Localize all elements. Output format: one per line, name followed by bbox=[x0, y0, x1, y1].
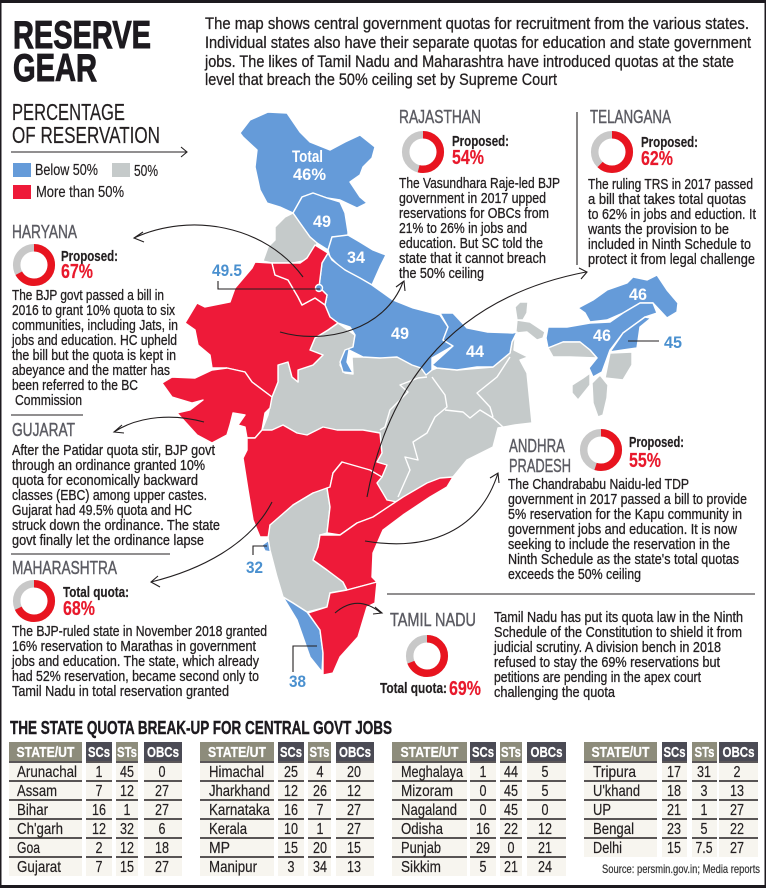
Gujarat bbox=[162, 368, 272, 443]
body text bbox=[12, 442, 220, 549]
map value labels: 49 bbox=[391, 324, 409, 343]
table 3: 0 bbox=[480, 802, 487, 819]
table 3: 1 bbox=[480, 764, 487, 781]
table 2: 7 bbox=[316, 802, 324, 819]
body text: Commission bbox=[15, 392, 82, 409]
table 1: 1 bbox=[96, 764, 103, 781]
table 3: OBCs bbox=[530, 744, 562, 761]
table 4: 31 bbox=[697, 764, 711, 781]
table 4: 15 bbox=[667, 840, 681, 857]
table 1: 6 bbox=[158, 821, 166, 838]
body text: judicial scrutiny. A division bench in 2018 bbox=[493, 639, 721, 656]
Bihar bbox=[432, 313, 517, 370]
table 2: 27 bbox=[347, 821, 361, 838]
legend bbox=[13, 162, 158, 201]
map of India bbox=[162, 112, 678, 675]
table 2: Jharkhand bbox=[209, 783, 270, 800]
table 3: Sikkim bbox=[401, 859, 441, 876]
Assam bbox=[546, 303, 657, 377]
map value labels: 46 bbox=[593, 326, 611, 345]
body text bbox=[11, 623, 267, 700]
body text: 21% to 26% in jobs and bbox=[399, 220, 527, 237]
table 4: 22 bbox=[730, 821, 744, 838]
body text: jobs and education. HC upheld bbox=[11, 332, 177, 349]
map leader lines bbox=[218, 281, 659, 672]
table 1: Arunachal bbox=[17, 764, 77, 781]
arrow: Haryana bbox=[134, 225, 303, 277]
body text: exceeds the 50% ceiling bbox=[508, 566, 641, 583]
table 3: 21 bbox=[538, 840, 552, 857]
table 1: 16 bbox=[92, 802, 106, 819]
donut chart bbox=[595, 135, 629, 169]
table 1: STs bbox=[117, 744, 137, 761]
body text: jobs and education. The state, which already bbox=[11, 653, 259, 670]
table 1: 27 bbox=[155, 802, 169, 819]
panel: Gujarat bbox=[12, 420, 220, 549]
table 3: Punjab bbox=[401, 840, 441, 857]
body text bbox=[508, 476, 747, 583]
body text: reservations for OBCs from bbox=[399, 205, 549, 222]
map value labels: 44 bbox=[466, 342, 485, 361]
body text: The BJP govt passed a bill in bbox=[12, 287, 164, 304]
table 1: Assam bbox=[17, 783, 57, 800]
Nagaland bbox=[610, 317, 651, 352]
table 1 bbox=[9, 742, 182, 876]
arrow: Rajasthan bbox=[280, 281, 405, 336]
table 2: Kerala bbox=[209, 821, 247, 838]
body text: communities, including Jats, in bbox=[12, 317, 178, 334]
table 1: OBCs bbox=[147, 744, 179, 761]
table 2: 3 bbox=[288, 859, 295, 876]
title bbox=[13, 14, 151, 90]
body text: abeyance and the matter has bbox=[12, 362, 170, 379]
table 1: SCs bbox=[88, 744, 110, 761]
table 4: 5 bbox=[700, 821, 708, 838]
table 3: 29 bbox=[476, 840, 490, 857]
heading: PRADESH bbox=[509, 456, 571, 476]
table 1: Gujarat bbox=[17, 859, 61, 876]
panel: Rajasthan: 54% bbox=[452, 147, 484, 169]
panel: Haryana: 67% bbox=[61, 261, 93, 283]
table 1: Bihar bbox=[17, 802, 49, 819]
map value labels: 34 bbox=[347, 248, 366, 267]
Andhra Pradesh bbox=[313, 477, 453, 590]
panel: Tamil Nadu: Total quota: bbox=[380, 680, 447, 697]
table 3: 0 bbox=[542, 802, 549, 819]
table 4: U'khand bbox=[593, 783, 640, 800]
panel: Haryana bbox=[11, 222, 178, 409]
body text: struck down the ordinance. The state bbox=[12, 517, 220, 534]
table 1: 7 bbox=[96, 859, 103, 876]
legend: More than 50% bbox=[36, 184, 124, 201]
table 2: 4 bbox=[316, 764, 324, 781]
table 2: 34 bbox=[313, 859, 327, 876]
map value labels: 49 bbox=[313, 212, 331, 231]
panel: Maharashtra: 68% bbox=[63, 598, 95, 620]
table 4: 13 bbox=[730, 783, 744, 800]
table 1: 12 bbox=[92, 821, 106, 838]
intro text: level that breach the 50% ceiling set by Supreme Court bbox=[205, 70, 557, 89]
Rajasthan bbox=[185, 262, 338, 397]
body text: 2016 to grant 10% quota to six bbox=[12, 302, 175, 319]
table 4: 21 bbox=[667, 802, 681, 819]
table 2: Himachal bbox=[209, 764, 264, 781]
table 2: 15 bbox=[347, 840, 361, 857]
panel: Telangana: Proposed: bbox=[641, 134, 698, 151]
body text: After the Patidar quota stir, BJP govt bbox=[12, 442, 216, 459]
table 2: STs bbox=[310, 744, 330, 761]
body text: govt finally let the ordinance lapse bbox=[12, 532, 204, 549]
table 2 bbox=[200, 742, 374, 876]
table 1: Ch'garh bbox=[17, 821, 63, 838]
table 1: 7 bbox=[96, 783, 103, 800]
table 3: 16 bbox=[476, 821, 490, 838]
table 4: STs bbox=[694, 744, 714, 761]
table 3: 45 bbox=[504, 802, 518, 819]
Mizoram bbox=[592, 375, 608, 417]
body text: government jobs and education. It is now bbox=[508, 521, 737, 538]
table 3: Odisha bbox=[401, 821, 443, 838]
heading: TAMIL NADU bbox=[390, 610, 476, 630]
heading: ANDHRA bbox=[509, 436, 565, 456]
table 3: 22 bbox=[504, 821, 518, 838]
table 2: 12 bbox=[284, 783, 298, 800]
body text bbox=[399, 175, 560, 282]
body text: Tamil Nadu in total reservation granted bbox=[12, 683, 229, 700]
table 3: 5 bbox=[542, 764, 549, 781]
arrow: Gujarat bbox=[114, 417, 204, 433]
legend heading bbox=[12, 99, 160, 148]
heading: RAJASTHAN bbox=[399, 107, 481, 127]
body text: classes (EBC) among upper castes. bbox=[12, 487, 207, 504]
Punjab bbox=[263, 213, 317, 263]
table 1: 32 bbox=[120, 821, 134, 838]
Haryana bbox=[272, 245, 328, 305]
Kerala bbox=[283, 597, 323, 672]
table 3 bbox=[392, 742, 566, 876]
table 4: 18 bbox=[667, 783, 681, 800]
table 2: MP bbox=[209, 840, 230, 857]
Jammu and Kashmir bbox=[240, 112, 375, 213]
body text: The BJP-ruled state in November 2018 granted bbox=[12, 623, 267, 640]
legend: Below 50% bbox=[35, 162, 98, 179]
body text: 16% reservation to Marathas in government bbox=[12, 638, 257, 655]
table 3: SCs bbox=[472, 744, 494, 761]
table 2: 20 bbox=[313, 840, 327, 857]
body text: state that it cannot breach bbox=[399, 250, 546, 267]
table 1: 0 bbox=[158, 764, 166, 781]
donut chart bbox=[17, 248, 51, 282]
legend arrow bbox=[11, 147, 187, 157]
body text: seeking to include the reservation in the bbox=[508, 536, 730, 553]
Sikkim bbox=[515, 302, 528, 320]
table 1: 12 bbox=[120, 783, 134, 800]
panel: Telangana bbox=[587, 107, 757, 268]
table 3: Nagaland bbox=[401, 802, 457, 819]
table 3: Mizoram bbox=[401, 783, 453, 800]
internal borders bbox=[380, 357, 510, 497]
table 2: 12 bbox=[347, 783, 361, 800]
title: RESERVE bbox=[13, 14, 151, 57]
panel: Haryana: Proposed: bbox=[61, 248, 118, 265]
table 3: STs bbox=[501, 744, 521, 761]
table 4: STATE/UT bbox=[592, 744, 650, 761]
table 2: 26 bbox=[313, 783, 327, 800]
Himachal Pradesh bbox=[293, 193, 348, 250]
table 2: Karnataka bbox=[209, 802, 270, 819]
map value labels: 38 bbox=[289, 672, 306, 691]
body text: education. But SC told the bbox=[399, 235, 543, 252]
table 3: Meghalaya bbox=[401, 764, 463, 781]
table 3: 12 bbox=[538, 821, 552, 838]
body text bbox=[11, 287, 178, 409]
table 1: 12 bbox=[120, 840, 134, 857]
table 2: Manipur bbox=[209, 859, 258, 876]
table 3: 5 bbox=[480, 859, 487, 876]
body text: been referred to the BC bbox=[12, 377, 138, 394]
Meghalaya bbox=[548, 342, 597, 358]
table 1: 1 bbox=[124, 802, 131, 819]
title: GEAR bbox=[13, 47, 97, 90]
heading: GUJARAT bbox=[12, 420, 75, 440]
table 4 bbox=[584, 742, 758, 857]
Delhi bbox=[316, 284, 322, 292]
table 2: 15 bbox=[284, 840, 298, 857]
panel: Andhra Pradesh: 55% bbox=[629, 450, 661, 472]
body text: through an ordinance granted 10% bbox=[12, 457, 205, 474]
table 4: Tripura bbox=[593, 764, 636, 781]
Tamil Nadu bbox=[308, 582, 377, 675]
table 3: 44 bbox=[504, 764, 518, 781]
table 3: STATE/UT bbox=[400, 744, 458, 761]
map value labels: 46 bbox=[629, 285, 647, 304]
table 3: 45 bbox=[504, 783, 518, 800]
table 1: 18 bbox=[155, 840, 169, 857]
body text: Gujarat had 49.5% quota and HC bbox=[12, 502, 192, 519]
table 2: 27 bbox=[347, 802, 361, 819]
table 4: UP bbox=[593, 802, 611, 819]
table 2: 16 bbox=[284, 802, 298, 819]
table 4: 27 bbox=[730, 840, 744, 857]
table 1: Goa bbox=[17, 840, 40, 857]
table 4: Delhi bbox=[593, 840, 622, 857]
arrow: Telangana bbox=[367, 268, 587, 497]
map value labels bbox=[212, 147, 682, 691]
table 2: 13 bbox=[347, 859, 361, 876]
table 3: 0 bbox=[508, 840, 515, 857]
table 2: SCs bbox=[280, 744, 302, 761]
table 2: 25 bbox=[284, 764, 298, 781]
intro text bbox=[204, 14, 751, 89]
panel: Telangana: 62% bbox=[641, 148, 673, 170]
panel: Andhra Pradesh: Proposed: bbox=[629, 434, 684, 451]
table 4: 2 bbox=[734, 764, 741, 781]
body text: The Chandrababu Naidu-led TDP bbox=[508, 476, 689, 493]
donut chart bbox=[410, 639, 444, 673]
table 4: OBCs bbox=[722, 744, 754, 761]
table 4: 1 bbox=[700, 802, 708, 819]
body text: quota for economically backward bbox=[12, 472, 198, 489]
table 3: 21 bbox=[504, 859, 518, 876]
body text: had 52% reservation, became second only to bbox=[12, 668, 259, 685]
table 3: 0 bbox=[480, 783, 487, 800]
table 3: 24 bbox=[538, 859, 552, 876]
body text bbox=[587, 176, 757, 268]
table 2: STATE/UT bbox=[208, 744, 266, 761]
table 2: 20 bbox=[347, 764, 361, 781]
body text: a bill that takes total quotas bbox=[588, 191, 746, 208]
panel: Andhra Pradesh bbox=[508, 433, 747, 583]
panel: Tamil Nadu: 69% bbox=[449, 678, 481, 700]
Karnataka bbox=[268, 488, 347, 612]
table 2: 10 bbox=[284, 821, 298, 838]
body text: government in 2017 upped bbox=[399, 190, 546, 207]
legend heading: PERCENTAGE bbox=[12, 99, 125, 125]
body text: the 50% ceiling bbox=[399, 265, 484, 282]
Maharashtra bbox=[243, 425, 387, 537]
donut chart bbox=[17, 584, 51, 618]
panel: Tamil Nadu bbox=[380, 609, 743, 701]
table 1: 45 bbox=[120, 764, 134, 781]
heading: HARYANA bbox=[12, 222, 77, 242]
Telangana bbox=[327, 462, 397, 535]
heading bbox=[509, 436, 571, 476]
table 4: 3 bbox=[700, 783, 708, 800]
map value labels: 32 bbox=[246, 558, 263, 577]
map value labels: 45 bbox=[664, 333, 682, 352]
heading: MAHARASHTRA bbox=[12, 558, 117, 578]
body text: challenging the quota bbox=[494, 684, 616, 701]
table 2: OBCs bbox=[339, 744, 371, 761]
arrow: Maharashtra bbox=[151, 502, 272, 587]
Arunachal Pradesh bbox=[578, 275, 678, 322]
map value labels: 49.5 bbox=[212, 261, 242, 280]
table 1: 2 bbox=[96, 840, 103, 857]
table 4: 17 bbox=[667, 764, 681, 781]
body text: the bill but the quota is kept in bbox=[12, 347, 176, 364]
table heading: THE STATE QUOTA BREAK-UP FOR CENTRAL GOVT JOBS bbox=[10, 718, 392, 738]
table 4: 23 bbox=[667, 821, 681, 838]
heading: TELANGANA bbox=[590, 107, 671, 127]
body text: The Vasundhara Raje-led BJP bbox=[399, 175, 560, 192]
table 4: 27 bbox=[730, 802, 744, 819]
central and eastern states at 50% bbox=[262, 320, 545, 510]
body text: refused to stay the 69% reservations but bbox=[494, 654, 721, 671]
legend heading: OF RESERVATION bbox=[12, 122, 160, 148]
table 1: 15 bbox=[120, 859, 134, 876]
Uttar Pradesh bbox=[319, 253, 453, 375]
map value labels: 46% bbox=[293, 165, 326, 184]
Uttarakhand bbox=[328, 235, 386, 285]
panel: Maharashtra: Total quota: bbox=[63, 584, 129, 601]
Tripura bbox=[572, 373, 590, 400]
donut chart bbox=[406, 135, 440, 169]
body text bbox=[493, 609, 743, 701]
table 4: Bengal bbox=[593, 821, 634, 838]
body text: petitions are pending in the apex court bbox=[494, 669, 702, 686]
table 1: 27 bbox=[155, 783, 169, 800]
table 4: SCs bbox=[664, 744, 686, 761]
panel: Rajasthan bbox=[399, 107, 560, 282]
map value labels: Total bbox=[292, 147, 323, 166]
arrow: Andhra Pradesh bbox=[365, 473, 499, 544]
donut chart bbox=[584, 433, 618, 467]
table 4: 7.5 bbox=[696, 840, 713, 857]
table 2: 1 bbox=[316, 821, 324, 838]
table 3: 5 bbox=[542, 783, 549, 800]
body text: wants the provision to be bbox=[587, 221, 729, 238]
panel: Maharashtra bbox=[11, 558, 267, 700]
table 1: 27 bbox=[155, 859, 169, 876]
table 1: STATE/UT bbox=[16, 744, 74, 761]
Manipur bbox=[605, 352, 632, 380]
arrow: Tamil Nadu bbox=[335, 603, 382, 614]
panel: Rajasthan: Proposed: bbox=[452, 133, 509, 150]
Goa bbox=[262, 540, 271, 552]
legend: 50% bbox=[134, 163, 158, 180]
